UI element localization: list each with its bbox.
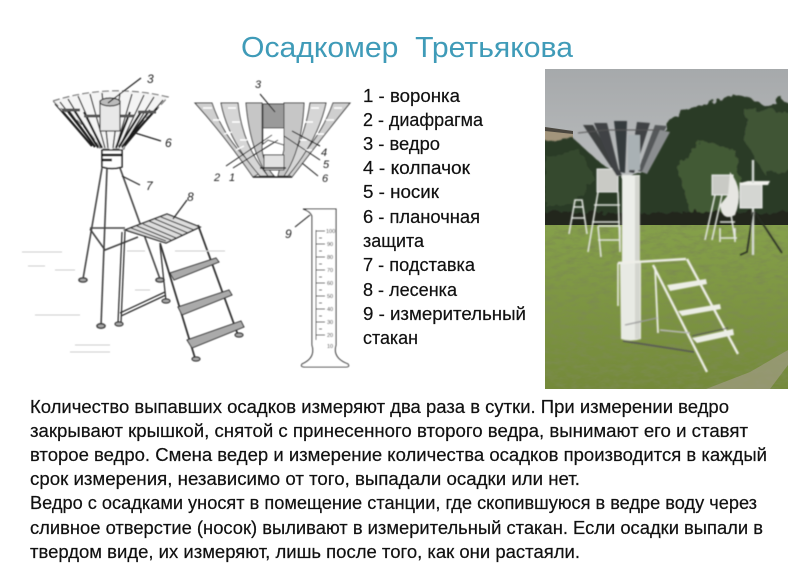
- illustration: funnel cross-section: 6: [322, 173, 329, 185]
- callout numbers: 3: [147, 72, 154, 86]
- background screens and ladders: [569, 192, 737, 257]
- building: [545, 131, 573, 142]
- scale numbers: 80: [327, 255, 333, 261]
- description paragraph: Ведро с осадками уносят в помещение станции, где скопившуюся в ведре воду через: [30, 493, 757, 513]
- callout leaders and numbers: [226, 94, 320, 176]
- parts list: 6 - планочная: [363, 207, 480, 227]
- parts list: 1 - воронка: [363, 86, 461, 106]
- gauge post: [622, 175, 640, 262]
- callout numbers: 8: [187, 190, 194, 204]
- description paragraph: срок измерения, независимо от того, выпадали осадки или нет.: [30, 469, 580, 489]
- stand legs: [79, 168, 164, 328]
- parts list: 4 - колпачок: [363, 158, 470, 178]
- description paragraph: Количество выпавших осадков измеряют два раза в сутки. При измерении ведро: [30, 397, 729, 417]
- scale numbers: 90: [327, 242, 333, 248]
- scale numbers: 100: [326, 229, 335, 235]
- collar: [102, 150, 122, 168]
- title: Осадкомер Третьякова: [241, 32, 574, 64]
- ground sketch marks: [22, 251, 225, 352]
- trees: [540, 95, 795, 232]
- scale numbers: 20: [327, 333, 333, 339]
- scale numbers: [326, 229, 335, 350]
- illustration: funnel cross-section: 2: [213, 172, 220, 184]
- illustration: funnel cross-section: 3: [255, 79, 262, 91]
- illustration: funnel cross-section: [195, 79, 350, 185]
- parts list: [363, 86, 526, 348]
- funnel with slatted shield: [53, 91, 168, 149]
- scale numbers: 60: [327, 281, 333, 287]
- description paragraph: закрывают крышкой, снятой с принесенного второго ведра, вынимают его и ставят: [30, 421, 748, 441]
- illustration: funnel cross-section: 5: [323, 159, 330, 171]
- parts list: 7 - подставка: [363, 255, 476, 275]
- parts list: 8 - лесенка: [363, 280, 458, 300]
- photo: rain gauge at weather station: [540, 69, 795, 389]
- callout numbers: 6: [165, 136, 172, 150]
- description paragraph: твердом виде, их измеряют, лишь после того, как они растаяли.: [30, 542, 580, 562]
- parts list: 3 - ведро: [363, 134, 440, 154]
- parts list: 5 - носик: [363, 182, 439, 202]
- callout number: 9: [285, 227, 292, 241]
- scale numbers: 10: [327, 344, 333, 350]
- illustration: funnel cross-section: 4: [321, 147, 327, 159]
- parts list: защита: [363, 231, 425, 251]
- scale numbers: 30: [327, 320, 333, 326]
- description paragraph: [30, 397, 767, 562]
- scale numbers: 70: [327, 268, 333, 274]
- parts list: 2 - диафрагма: [363, 110, 484, 130]
- description paragraph: второе ведро. Смена ведер и измерение количества осадков производится в каждый: [30, 445, 767, 465]
- ladder: [115, 214, 244, 361]
- parts list: стакан: [363, 328, 418, 348]
- callout numbers: [146, 72, 194, 204]
- grass: [545, 225, 788, 389]
- illustration: funnel cross-section: 1: [229, 172, 235, 184]
- callout numbers: 7: [146, 179, 154, 193]
- ladder in photo: [618, 259, 738, 372]
- gauge vanes: [578, 121, 670, 176]
- description paragraph: сливное отверстие (носок) выливают в измерительный стакан. Если осадки выпали в: [30, 518, 763, 538]
- parts list: 9 - измерительный: [363, 304, 526, 324]
- scale numbers: 50: [327, 294, 333, 300]
- callouts 3 6 7 8 leaders: [108, 78, 187, 219]
- illustration: measuring glass: [285, 209, 349, 367]
- illustration: rain gauge on stand with step ladder: [22, 72, 244, 361]
- scale numbers: 40: [327, 307, 333, 313]
